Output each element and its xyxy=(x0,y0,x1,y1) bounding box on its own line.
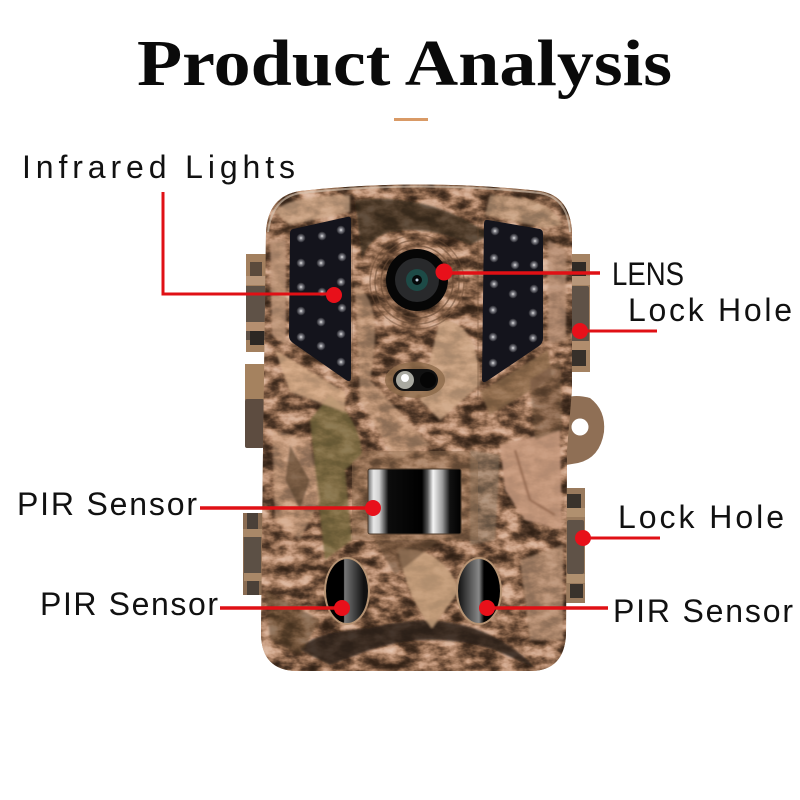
right round PIR sensor xyxy=(456,557,502,625)
callout: right PIR sensor xyxy=(479,593,793,629)
flash and light sensor xyxy=(385,362,445,398)
left round PIR sensor xyxy=(324,557,370,625)
title: Product Analysis xyxy=(137,27,672,100)
callout: lower lock hole: Lock Hole xyxy=(618,499,784,535)
left infrared LED panel xyxy=(289,217,351,381)
callout: lens xyxy=(436,256,684,292)
right infrared LED panel xyxy=(482,220,543,382)
camo body xyxy=(255,178,580,678)
title accent dash xyxy=(394,118,428,121)
callout: upper lock hole xyxy=(572,292,792,339)
callout: upper lock hole: Lock Hole xyxy=(628,292,792,328)
right side latches and strap loop xyxy=(558,254,604,603)
lens xyxy=(370,235,464,329)
callout: left PIR sensor xyxy=(40,586,350,622)
callout: left PIR sensor: PIR Sensor xyxy=(40,586,218,622)
camera xyxy=(243,178,604,678)
callout: central PIR sensor: PIR Sensor xyxy=(17,486,197,522)
callout: lens: LENS xyxy=(612,256,684,292)
left side latches xyxy=(243,254,272,595)
callout: infrared lights: Infrared Lights xyxy=(22,149,295,185)
central PIR sensor xyxy=(352,451,478,540)
callout: lower lock hole xyxy=(575,499,784,546)
callout: infrared lights xyxy=(22,149,342,303)
callout: central PIR sensor xyxy=(17,486,381,522)
callout: right PIR sensor: PIR Sensor xyxy=(613,593,793,629)
